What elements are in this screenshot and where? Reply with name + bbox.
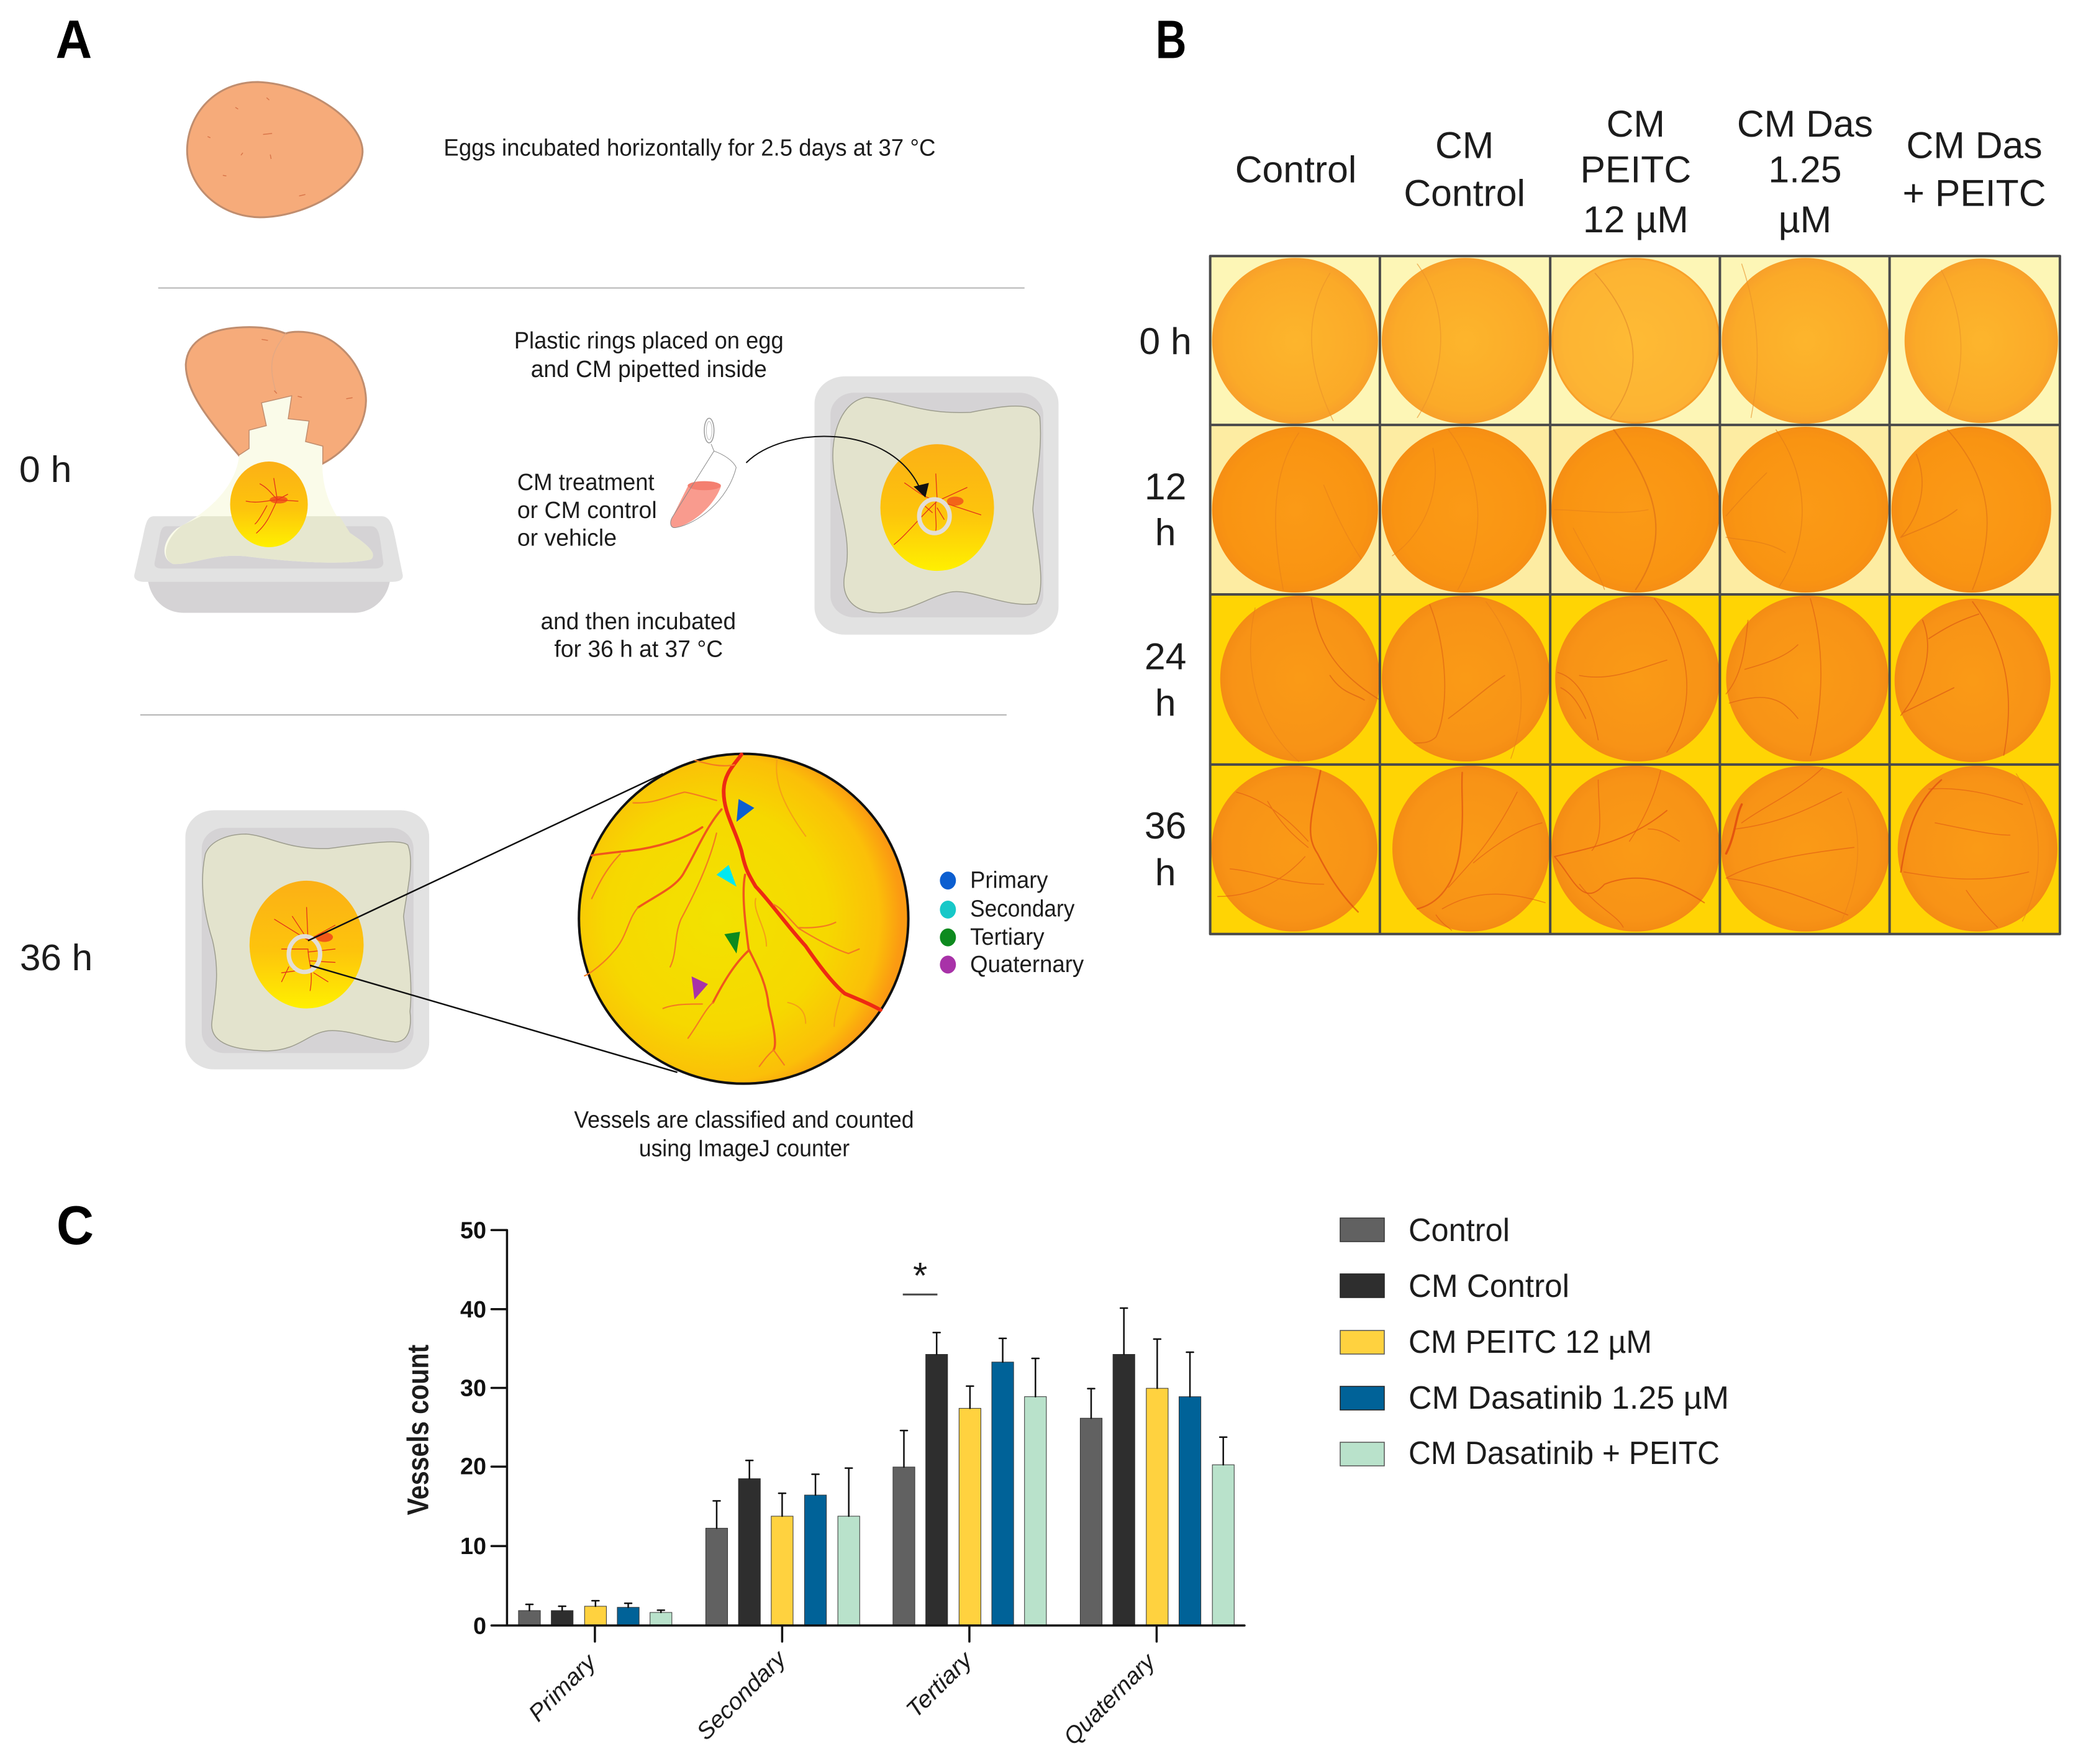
panel A: experimental workflow — [19, 9, 1084, 1162]
text: classification note: Vessels are classified and counted — [574, 1107, 914, 1134]
photo: CM Das + PEITC 24 h — [1895, 599, 2051, 762]
icon: tray with egg and ring, 36 h — [185, 811, 429, 1070]
column headers: CM — [1607, 102, 1665, 145]
row headers: h — [1155, 851, 1176, 893]
column headers: CM — [1435, 124, 1494, 166]
x axis labels: Quaternary — [1059, 1648, 1161, 1750]
heading: B: B — [1156, 9, 1186, 70]
text: rings step — [514, 328, 784, 383]
text: incubation step: Eggs incubated horizontally for 2.5 days at 37 °C — [443, 135, 935, 161]
marker: primary — [737, 799, 755, 822]
row headers: 12 — [1145, 465, 1186, 507]
photo: Control 12 h — [1212, 427, 1378, 593]
y axis tick labels — [460, 1218, 486, 1639]
photo: CM Das + PEITC 36 h — [1898, 766, 2057, 932]
error bars — [526, 1308, 1227, 1612]
row headers — [1139, 320, 1192, 893]
row headers: 24 — [1145, 635, 1186, 678]
photo: CM PEITC 0 h — [1551, 258, 1720, 424]
bars: Primary — [519, 1606, 672, 1625]
photo: CM Control 24 h — [1382, 596, 1550, 762]
photo: Control 36 h — [1212, 766, 1377, 932]
column headers: + PEITC — [1903, 171, 2046, 214]
icon: cracked egg over tray — [134, 327, 403, 613]
y axis tick labels: 10 — [460, 1534, 486, 1560]
chart legend: CM Dasatinib + PEITC — [1409, 1435, 1720, 1471]
text: incubation after treatment: and then incubated — [541, 609, 736, 635]
text: treatment options: or CM control — [517, 498, 657, 524]
row headers: 0 h — [1139, 320, 1192, 362]
y axis tick labels: 30 — [460, 1375, 486, 1401]
workflow lower row: vessel classification — [20, 715, 1084, 1162]
text: rings step: and CM pipetted inside — [531, 357, 767, 383]
bars: Quaternary — [1080, 1355, 1234, 1625]
photo: CM Das 36 h — [1721, 766, 1890, 932]
photo: CM Das 0 h — [1722, 258, 1889, 424]
chart legend — [1340, 1212, 1729, 1471]
text: treatment options — [517, 470, 657, 552]
magnified vessel view — [579, 754, 909, 1084]
workflow upper rows: egg and treatment — [19, 9, 1058, 663]
label: 0 h: 0 h — [19, 448, 71, 490]
row headers: 36 — [1145, 804, 1186, 847]
legend: vessel classes: Primary — [970, 868, 1048, 894]
chart legend: CM PEITC 12 µM — [1409, 1324, 1652, 1360]
photo: CM Control 12 h — [1382, 427, 1546, 593]
bars — [491, 1230, 1245, 1642]
axes — [491, 1230, 1245, 1642]
text: incubation after treatment — [541, 609, 736, 663]
marker: secondary — [717, 865, 737, 886]
x axis labels: Tertiary — [901, 1646, 978, 1723]
secondary and tertiary vessels — [592, 809, 775, 1050]
photo: Control 24 h — [1220, 596, 1380, 762]
marker: tertiary — [724, 932, 740, 953]
marker: quaternary — [692, 976, 708, 999]
x axis labels: Secondary — [692, 1645, 792, 1745]
photo: CM PEITC 36 h — [1551, 766, 1720, 932]
primary vessels — [724, 755, 881, 1010]
photo: CM Das + PEITC 12 h — [1892, 427, 2051, 593]
legend: vessel classes: Quaternary — [970, 952, 1084, 978]
y axis tick labels: 20 — [460, 1454, 486, 1480]
text: rings step: Plastic rings placed on egg — [514, 328, 784, 354]
chart legend: CM Dasatinib 1.25 µM — [1409, 1380, 1729, 1416]
bars: Secondary — [705, 1479, 860, 1625]
photo: CM PEITC 12 h — [1551, 427, 1720, 593]
legend: vessel classes: Secondary — [970, 896, 1074, 922]
photo: Control 0 h — [1212, 258, 1378, 424]
photo: CM Das + PEITC 0 h — [1905, 258, 2058, 423]
text: classification note — [574, 1107, 914, 1162]
column headers: CM Das — [1906, 124, 2043, 166]
panel C: bar chart and legend — [57, 1194, 1729, 1750]
photo: CM Control 36 h — [1392, 766, 1549, 932]
photo grid cells — [1210, 256, 2060, 934]
panel B: photo grid — [1139, 9, 2060, 934]
quaternary vessels — [584, 760, 859, 1066]
heading: C: C — [57, 1194, 94, 1256]
chart legend: CM Control — [1409, 1268, 1569, 1304]
y axis tick labels: 50 — [460, 1218, 486, 1244]
chart legend: Control — [1409, 1212, 1510, 1248]
text: classification note: using ImageJ counter — [639, 1135, 850, 1162]
y axis title: Vessels count — [402, 1345, 435, 1515]
column headers: 12 µM — [1583, 198, 1689, 240]
text: treatment options: or vehicle — [517, 525, 617, 552]
row headers: h — [1155, 681, 1176, 724]
chart: vessel counts — [402, 1218, 1245, 1750]
column headers: 1.25 — [1768, 148, 1842, 191]
arrow: tube to ring — [746, 436, 929, 498]
bars: Tertiary — [893, 1355, 1046, 1625]
zoom guide lines — [308, 774, 678, 1072]
photo: CM PEITC 24 h — [1555, 596, 1720, 762]
photo: CM Das 12 h — [1722, 427, 1889, 593]
column headers: Control — [1404, 171, 1525, 214]
legend: vessel classes: Tertiary — [970, 924, 1045, 950]
x axis labels — [524, 1645, 1161, 1750]
label: 36 h: 36 h — [20, 937, 93, 978]
icon: whole egg — [187, 82, 363, 217]
text: treatment options: CM treatment — [517, 470, 655, 496]
text: incubation after treatment: for 36 h at 37 °C — [555, 637, 723, 663]
column headers — [1235, 102, 2046, 240]
significance marker — [903, 1255, 937, 1296]
photo: CM Das 24 h — [1726, 596, 1889, 762]
heading: A: A — [56, 9, 92, 70]
column headers: µM — [1779, 198, 1831, 240]
icon: tray with egg and ring, 0 h — [815, 376, 1058, 635]
icon: pipette tube — [671, 418, 736, 528]
y axis tick labels: 40 — [460, 1297, 486, 1323]
column headers: CM Das — [1737, 102, 1873, 145]
photo: CM Control 0 h — [1382, 258, 1549, 424]
significance marker: * — [913, 1255, 927, 1296]
legend: vessel classes — [940, 868, 1084, 978]
y axis tick labels: 0 — [473, 1613, 486, 1639]
column headers: Control — [1235, 148, 1356, 191]
row headers: h — [1155, 511, 1176, 553]
x axis labels: Primary — [524, 1648, 602, 1727]
column headers: PEITC — [1580, 148, 1691, 191]
